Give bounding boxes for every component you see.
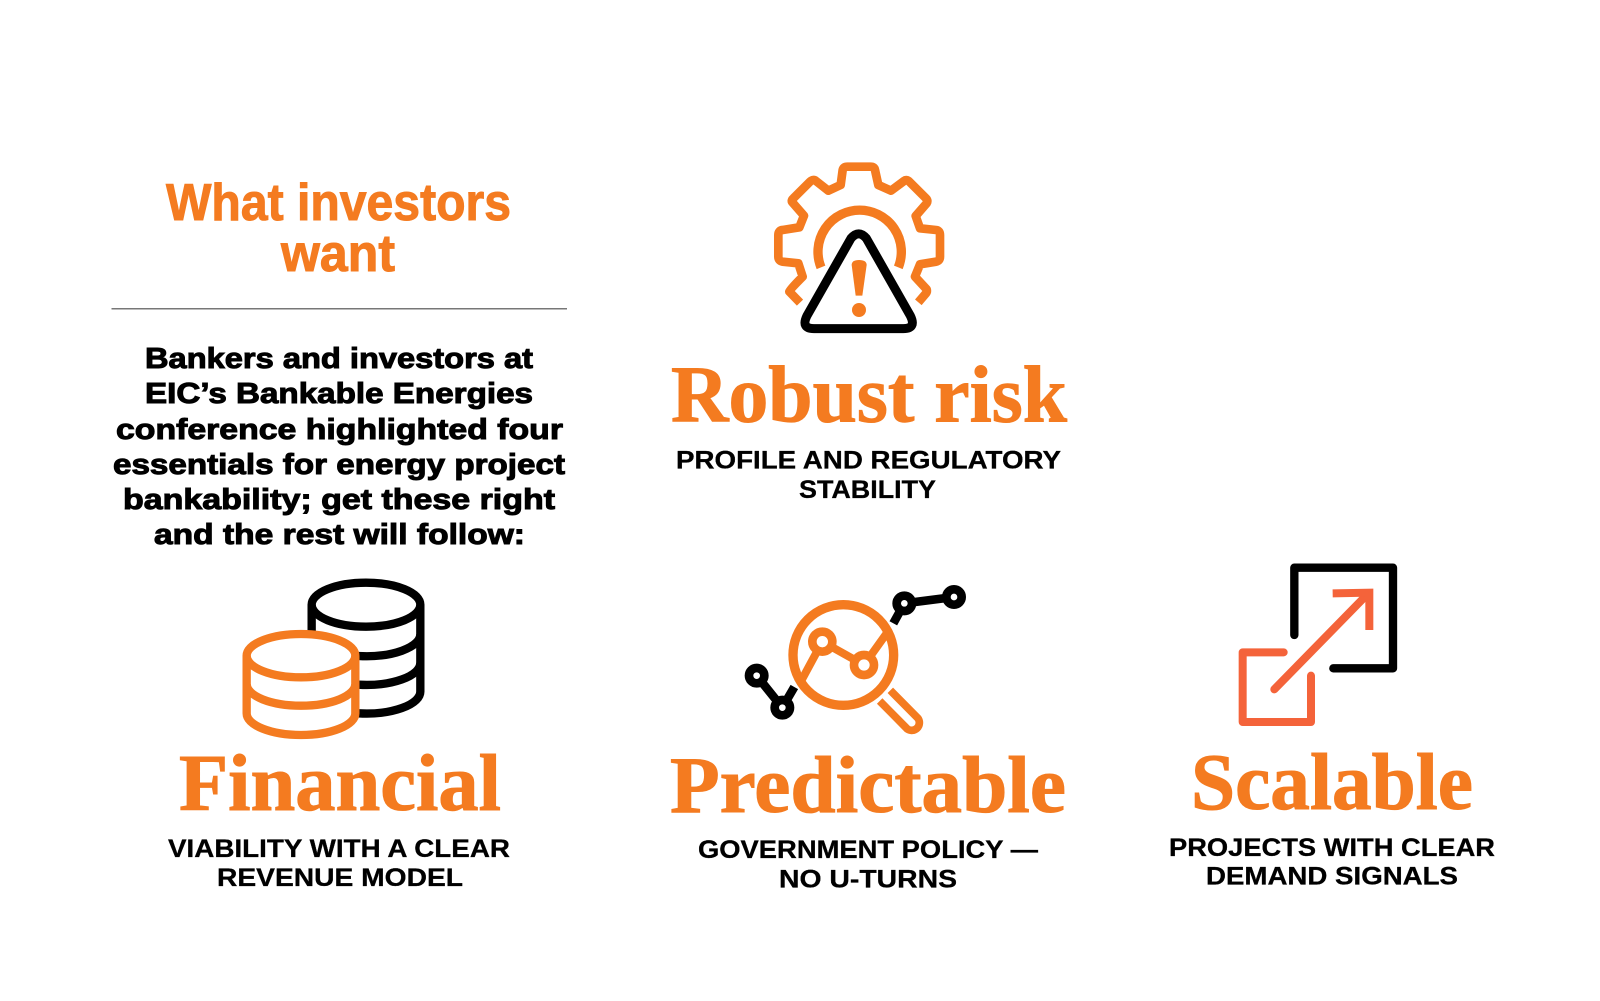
intro text: conference highlighted four: [116, 414, 563, 446]
heading: financial: Financial: [179, 740, 501, 828]
panel: predictable: [670, 589, 1066, 894]
caption: predictable: [698, 836, 1038, 894]
caption: predictable: GOVERNMENT POLICY —: [698, 836, 1038, 864]
caption: financial: [168, 835, 510, 892]
heading: robust risk: Robust risk: [671, 352, 1068, 440]
title: What investors: [166, 174, 511, 232]
caption: financial: REVENUE MODEL: [217, 864, 463, 892]
caption: robust risk: PROFILE AND REGULATORY: [676, 446, 1061, 474]
panel: financial: [168, 583, 510, 892]
intro text: essentials for energy project: [113, 449, 565, 481]
intro text: [113, 343, 565, 551]
caption: predictable: NO U-TURNS: [779, 866, 957, 894]
intro text: Bankers and investors at: [145, 343, 533, 375]
panel: robust risk: [671, 167, 1068, 504]
title: want: [280, 225, 395, 283]
caption: scalable: [1169, 834, 1495, 890]
caption: scalable: DEMAND SIGNALS: [1206, 862, 1458, 890]
title: [166, 174, 511, 283]
intro text: and the rest will follow:: [154, 519, 525, 551]
caption: scalable: PROJECTS WITH CLEAR: [1169, 834, 1495, 862]
icon: stacked coins: [247, 583, 420, 735]
intro text: bankability; get these right: [123, 484, 555, 516]
caption: financial: VIABILITY WITH A CLEAR: [168, 835, 510, 863]
caption: robust risk: STABILITY: [799, 476, 936, 504]
heading: predictable: Predictable: [670, 742, 1066, 830]
heading: scalable: Scalable: [1191, 739, 1473, 827]
icon: magnifier over line chart: [749, 589, 962, 730]
icon: expanding squares with arrow: [1243, 568, 1393, 722]
panel: scalable: [1169, 568, 1495, 890]
intro text: EIC’s Bankable Energies: [145, 378, 533, 410]
icon: gear with warning triangle: [778, 167, 940, 329]
caption: robust risk: [676, 446, 1061, 504]
